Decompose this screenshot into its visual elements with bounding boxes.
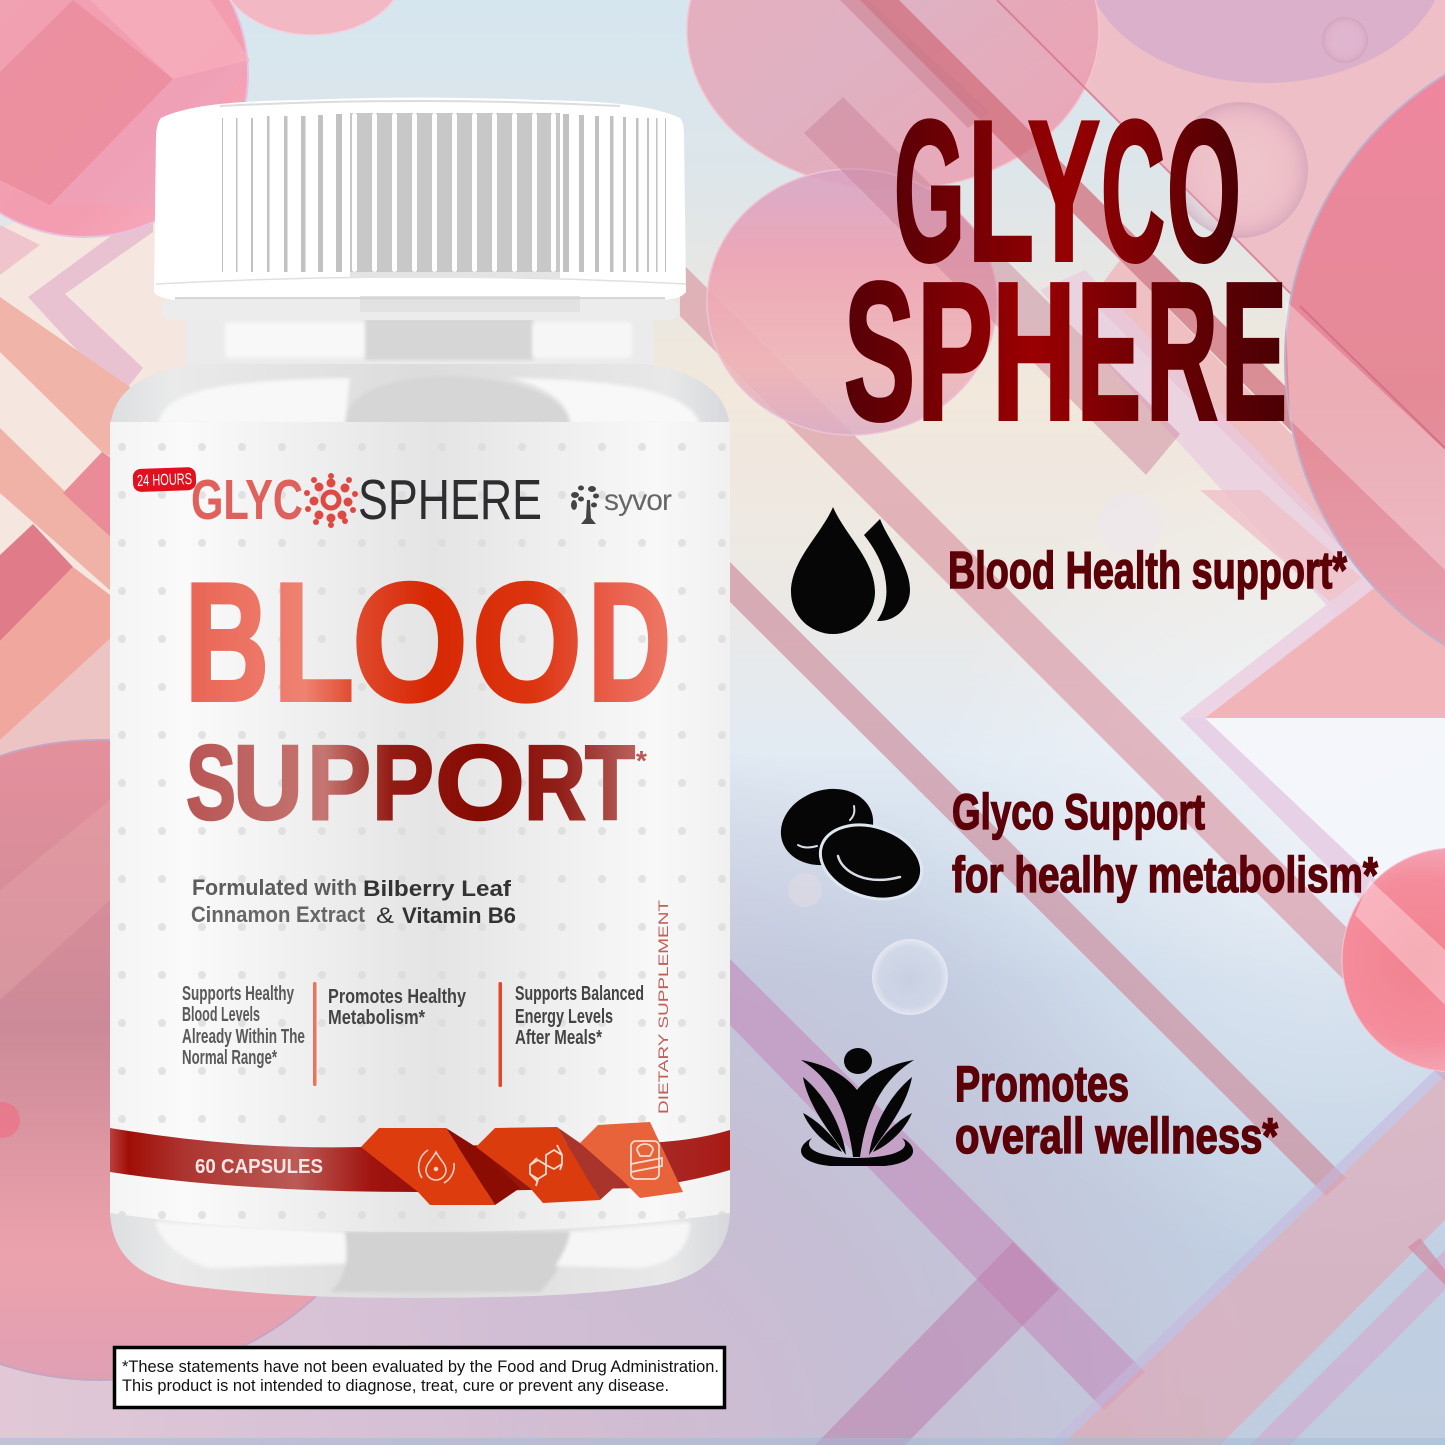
title: L: [968, 80, 1034, 303]
benefit column 3: [515, 983, 644, 1049]
heading: BLOOD: O: [352, 548, 468, 736]
disclaimer box: *These statements have not been evaluated by the Food and Drug Administration.: [122, 1358, 719, 1376]
wordmark GLYC: GLYC: [191, 468, 303, 532]
wordmark syvor: syvor: [604, 484, 672, 517]
icon: circulating drop: [419, 1150, 454, 1183]
heading: SUPPORT: [186, 724, 647, 842]
icon: scale and tape: [631, 1141, 662, 1179]
icon: wellness figure: [801, 1048, 914, 1166]
cap ribs: [222, 113, 666, 272]
icon: red blood cells: [771, 777, 931, 911]
ribbon segment 3: [580, 1122, 683, 1198]
benefit column 2: Metabolism*: [328, 1007, 425, 1029]
ingredients text: Cinnamon Extract: [191, 902, 366, 927]
ingredients text: &: [376, 903, 394, 928]
title: [844, 80, 1287, 461]
feature: glyco support: [771, 777, 1378, 911]
divider 2: [498, 982, 502, 1087]
cap collar: [161, 300, 679, 320]
heading: SUPPORT: O: [435, 724, 525, 842]
text: glyco support: Glyco Support: [952, 784, 1205, 840]
title: O: [1167, 80, 1241, 303]
title: R: [1146, 242, 1218, 461]
left geometric pattern: [0, 100, 330, 800]
title: H: [992, 242, 1076, 461]
title: G: [894, 80, 965, 303]
benefit column 2: [328, 986, 467, 1029]
benefit column 1: Blood Levels: [182, 1004, 260, 1026]
heading: SUPPORT: P: [372, 724, 434, 842]
ingredients text: Formulated with: [192, 875, 357, 900]
icon: sphere: [304, 473, 358, 528]
text: promotes: Promotes: [955, 1056, 1129, 1112]
benefit column 2: Promotes Healthy: [328, 986, 467, 1008]
ingredients text: [191, 875, 516, 928]
benefit column 3: Supports Balanced: [515, 983, 644, 1005]
badge: 24 hours: [133, 467, 196, 492]
dietary supplement vertical text: DIETARY SUPPLEMENT: [655, 899, 671, 1114]
bottle cap: [154, 98, 686, 320]
product label: [110, 422, 730, 1232]
heading: BLOOD: B: [185, 548, 269, 736]
title: E: [1221, 242, 1287, 461]
heading: BLOOD: O: [472, 548, 582, 736]
benefit column 1: Supports Healthy: [182, 983, 295, 1005]
heading: SUPPORT: T: [585, 724, 635, 842]
badge: 24 hours: 24 HOURS: [137, 471, 192, 490]
title: E: [1077, 242, 1141, 461]
heading: SUPPORT: S: [186, 724, 236, 842]
upper right bands: [997, 0, 1445, 985]
heading: BLOOD: L: [273, 548, 354, 736]
icon: blood drops: [791, 507, 910, 634]
diagonal bands: [680, 261, 1445, 1081]
wordmark SPHERE: SPHERE: [358, 468, 542, 532]
heading: SUPPORT: U: [233, 724, 303, 842]
title: Y: [1028, 80, 1100, 303]
benefit column 3: Energy Levels: [515, 1006, 613, 1028]
benefit column 1: [182, 983, 305, 1069]
disclaimer box: This product is not intended to diagnose, treat, cure or prevent any disease.: [122, 1377, 669, 1395]
title: P: [917, 242, 993, 461]
ingredients text: Vitamin B6: [402, 903, 516, 928]
heading: SUPPORT: P: [307, 724, 371, 842]
icon: molecule: [530, 1145, 562, 1186]
ingredients text: Bilberry Leaf: [363, 876, 512, 901]
ribbon segment 1: [361, 1128, 495, 1205]
benefit column 1: Normal Range*: [182, 1047, 277, 1069]
title: S: [844, 242, 915, 461]
disclaimer box: [114, 1348, 724, 1408]
brand logo: [133, 467, 672, 532]
bottle neck: [186, 316, 654, 372]
red ribbon band: [110, 1122, 730, 1205]
heading: SUPPORT: *: [636, 745, 647, 776]
ribbon segment 2: [476, 1127, 600, 1203]
text: overall wellness: overall wellness*: [955, 1108, 1278, 1164]
benefit column 3: After Meals*: [515, 1027, 602, 1049]
divider 1: [313, 982, 316, 1086]
heading: SUPPORT: R: [524, 724, 586, 842]
heading: BLOOD: D: [588, 548, 671, 736]
product bottle: [110, 98, 730, 1298]
feature: overall wellness: [801, 1048, 1278, 1166]
feature: blood health: [791, 507, 1348, 634]
benefit column 1: Already Within The: [182, 1026, 305, 1048]
bottle body: [110, 364, 730, 1298]
title: C: [1101, 80, 1165, 303]
capsule count: 60 CAPSULES: [195, 1156, 323, 1178]
icon: syvor tree: [571, 486, 599, 524]
